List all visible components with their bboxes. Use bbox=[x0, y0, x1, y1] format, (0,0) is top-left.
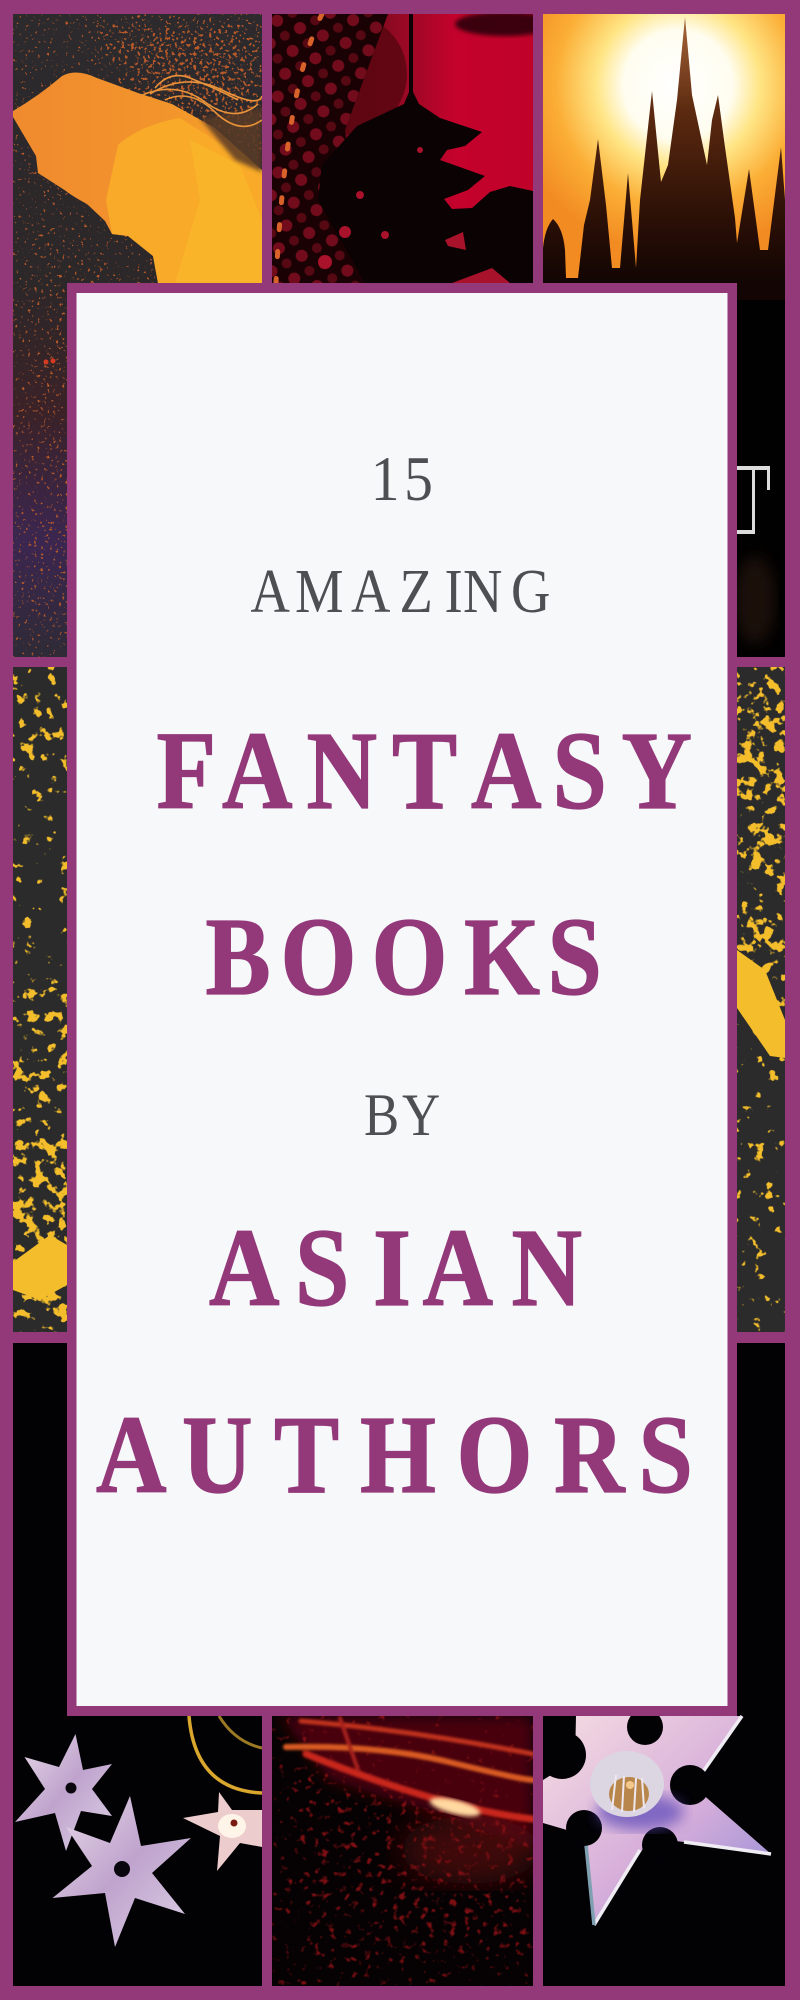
purple shadow around the eye bbox=[596, 1794, 684, 1830]
splatter bbox=[13, 672, 67, 1332]
title: AMAZING: AMAZING bbox=[251, 557, 550, 626]
dark moon bbox=[345, 26, 407, 134]
eye tuft bbox=[590, 1751, 664, 1817]
castle silhouette bbox=[543, 17, 785, 300]
dark patch on body bbox=[200, 108, 262, 172]
cover: golden hooded figure bbox=[13, 14, 262, 657]
pagoda red flecks bbox=[318, 147, 510, 283]
star body bbox=[543, 1716, 771, 1925]
cover: shuriken group on black bbox=[13, 1343, 262, 1986]
panel frame bbox=[67, 283, 737, 1716]
dark cloud bbox=[452, 14, 533, 38]
panel fill bbox=[76, 293, 728, 1706]
red speckles bbox=[285, 1760, 533, 1960]
cover: giant shuriken bbox=[538, 1343, 785, 1986]
title: AUTHORS: AUTHORS bbox=[96, 1393, 693, 1516]
cover: yellow splatter, left sliver bbox=[13, 667, 67, 1332]
glowing shuriken bbox=[183, 1792, 262, 1871]
red dots bbox=[44, 360, 48, 364]
golden light arcs bbox=[189, 1716, 262, 1793]
letter T fragment bbox=[737, 466, 770, 534]
golden body bbox=[106, 118, 262, 283]
glowing bead arc bbox=[276, 14, 322, 283]
title: 15: 15 bbox=[371, 444, 433, 515]
title: BY: BY bbox=[364, 1083, 440, 1149]
hair wisps bbox=[140, 76, 262, 126]
splatter bbox=[737, 667, 785, 1060]
hood bbox=[13, 72, 262, 283]
brown glow low in cover bbox=[735, 556, 775, 644]
orange speckle spray bbox=[20, 22, 262, 640]
solid yellow streak bbox=[737, 950, 785, 1058]
bright spot bbox=[428, 1794, 482, 1820]
blade edges bbox=[586, 1716, 771, 1925]
dotted dark band bbox=[272, 14, 388, 283]
cover: red streak comet on black bbox=[272, 1716, 540, 1986]
title: ASIAN: ASIAN bbox=[209, 1206, 582, 1329]
solid yellow blotch bbox=[13, 1235, 67, 1300]
streak lines bbox=[286, 1718, 533, 1819]
small shuriken bbox=[15, 1734, 112, 1851]
pagoda silhouette bbox=[318, 14, 533, 283]
title: BOOKS: BOOKS bbox=[205, 895, 602, 1018]
title: FANTASY: FANTASY bbox=[156, 709, 692, 832]
large shuriken bbox=[52, 1796, 191, 1947]
star notches bbox=[550, 1716, 706, 1850]
red glow bbox=[280, 1716, 533, 1850]
cover: red pagoda bbox=[272, 12, 555, 283]
cover: castle against the sun bbox=[543, 14, 785, 657]
title panel bbox=[67, 283, 737, 1716]
cover: yellow splatter, right sliver bbox=[737, 667, 785, 1332]
